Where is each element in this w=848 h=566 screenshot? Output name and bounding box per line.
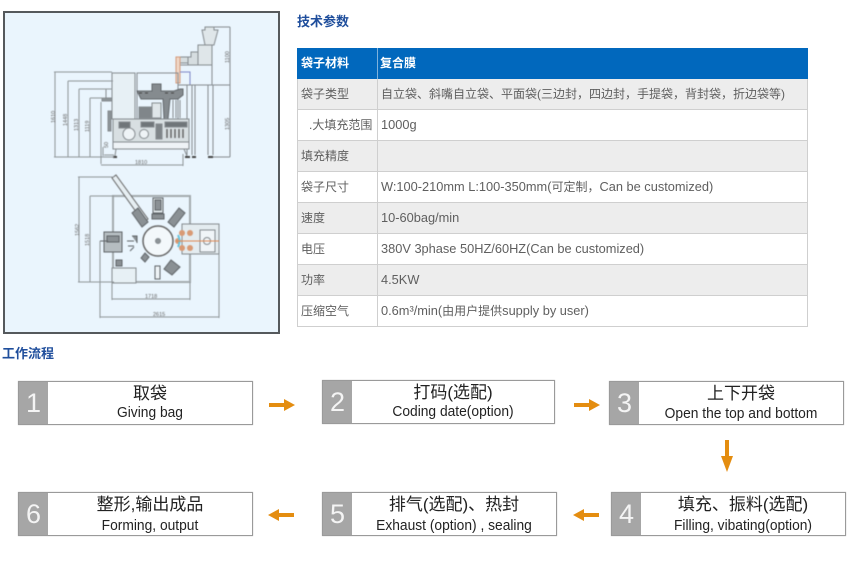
arrow: step 4 to step 5 [573,509,599,521]
step 3: 上下开袋 [707,384,775,403]
row: bag size: 袋子尺寸 [301,180,349,194]
side view dimension labels: 1305 [225,118,231,130]
step 6: 整形,输出成品 [97,495,203,514]
row: bag type: 自立袋、斜嘴自立袋、平面袋(三边封，四边封，手提袋，背封袋，折边袋等) [381,87,785,101]
step 5 [322,492,557,536]
step 1: Giving bag [117,404,183,421]
top view dimension labels: 2615 [153,312,165,318]
step 3 [609,381,844,425]
row: compressed air: 0.6m³/min(由用户提供supply by user) [381,303,589,318]
row: speed [297,203,808,234]
table: technical parameters [297,48,808,327]
step 3: 3 [617,388,632,418]
step 2: 2 [330,387,345,417]
heading: technical parameters: 技术参数 [297,14,349,29]
arrow: step 5 to step 6 [268,509,294,521]
side view: hopper and feeder [176,27,230,157]
row: filling range: .大填充范围 [309,118,372,132]
row: bag size: W:100-210mm L:100-350mm(可定制，Can be customized) [381,179,713,194]
step 4: Filling, vibating(option) [674,517,812,534]
step 4: 4 [619,499,634,529]
top view dimension labels: 1518 [85,234,91,246]
top view: filling head [175,230,219,251]
row: filling accuracy [297,141,808,172]
step 1: 1 [26,388,41,418]
step 1 [18,381,253,425]
dimension lines: top view [78,177,219,318]
step 5: Exhaust (option) , sealing [376,517,532,534]
row: voltage: 380V 3phase 50HZ/60HZ(Can be customized) [381,241,644,256]
row: voltage: 电压 [301,242,325,256]
step 5: 5 [330,499,345,529]
side view: machine body [102,73,213,157]
side view dimension labels: 1100 [225,51,231,63]
row: filling range: 1000g [381,117,417,132]
top view dimension labels [75,224,165,318]
side view dimension labels: 1610 [51,111,57,123]
panel: machine dimension drawing [3,11,280,334]
row: bag type [297,79,808,110]
diagram: machine side and top views [50,26,232,318]
row: speed: 速度 [301,211,325,225]
row: power: 4.5KW [381,272,419,287]
arrow: step 2 to step 3 [574,399,600,411]
side view dimension labels: 1810 [135,160,147,166]
row: power: 功率 [301,273,325,287]
row: bag material: 复合膜 [380,56,416,70]
side view dimension labels [51,51,231,166]
row: filling range [297,110,808,141]
step 4 [611,492,846,536]
row: voltage [297,234,808,265]
row: bag material: 袋子材料 [301,56,349,70]
row: bag material [297,48,808,79]
row: compressed air [297,296,808,327]
top view: stations around turntable [100,198,185,279]
side view dimension labels: 50 [104,142,110,148]
step 2: Coding date(option) [392,403,514,420]
side view dimension labels: 1119 [85,121,91,132]
dimension lines: side view [54,72,183,166]
top view: frame and conveyor [112,175,219,283]
row: speed: 10-60bag/min [381,210,459,225]
step 6: 6 [26,499,41,529]
step 6: Forming, output [102,517,198,534]
row: filling accuracy: 填充精度 [301,149,349,163]
heading: workflow: 工作流程 [2,346,54,361]
step 2: 打码(选配) [413,383,493,402]
arrow: step 1 to step 2 [269,399,295,411]
row: bag type: 袋子类型 [301,87,349,101]
step 3: Open the top and bottom [665,405,817,422]
step 6 [18,492,253,536]
arrow: step 3 to step 4 [721,440,733,472]
step 5: 排气(选配)、热封 [389,495,519,514]
row: power [297,265,808,296]
row: bag size [297,172,808,203]
step 1: 取袋 [133,384,167,403]
row: compressed air: 压缩空气 [301,304,349,318]
side view dimension labels: 1448 [63,114,69,126]
top view dimension labels: 1718 [145,294,157,300]
step 2 [322,380,555,424]
top view dimension labels: 1562 [75,224,81,236]
side view dimension labels: 1313 [74,119,80,131]
step 4: 填充、振料(选配) [678,495,808,514]
